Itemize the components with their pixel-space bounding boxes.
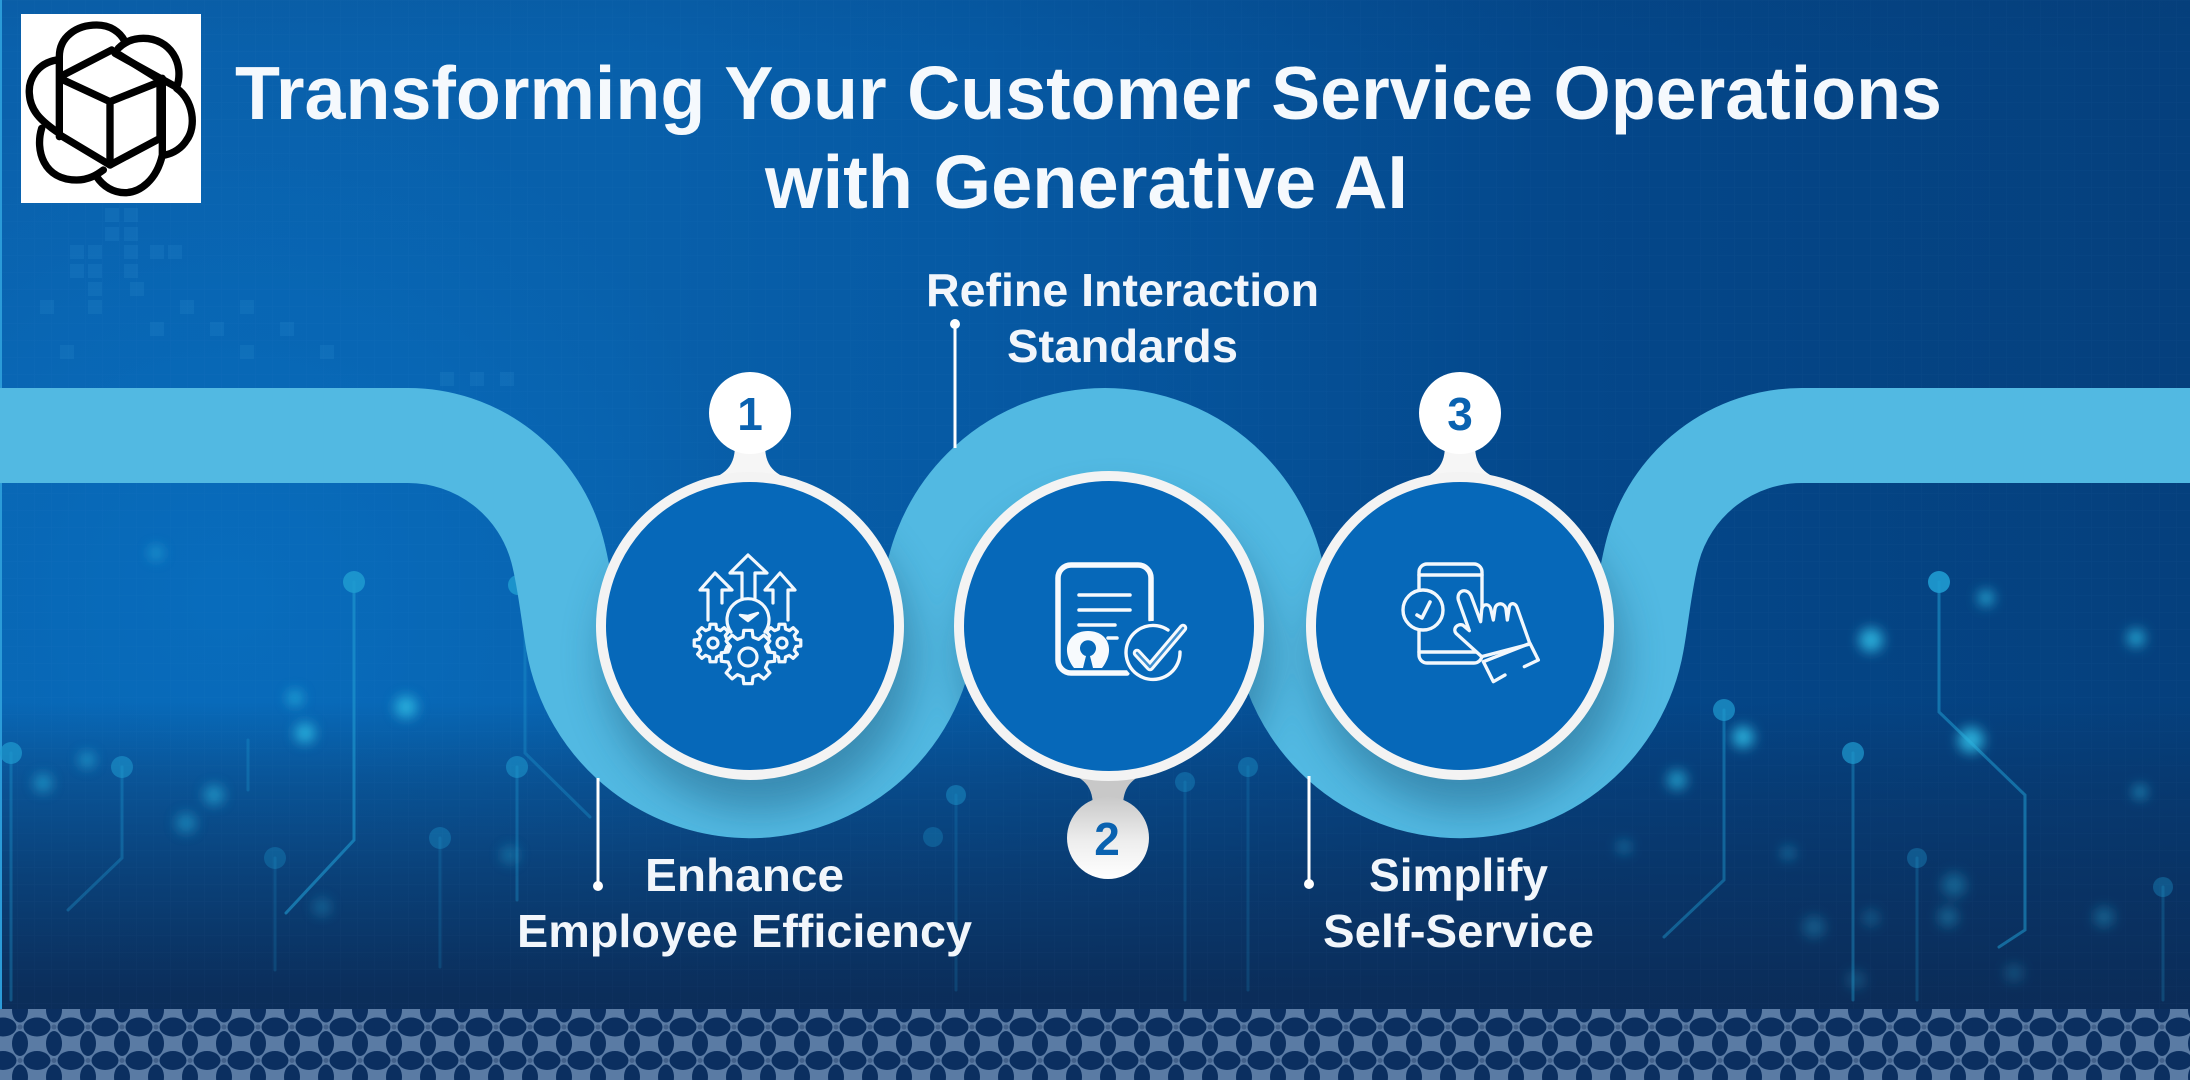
circle 1 (601, 477, 899, 775)
label: Refine Interaction Standards: Standards (1007, 320, 1238, 372)
label: Simplify Self-Service: Self-Service (1323, 905, 1594, 957)
leader line: Refine (950, 319, 960, 448)
leader line: Enhance (593, 778, 603, 891)
icon: document with seal and check (1058, 565, 1183, 683)
number bubble 2: 2 (1094, 813, 1120, 865)
bottom lattice strip (0, 1009, 2190, 1080)
label: Refine Interaction Standards (926, 264, 1319, 372)
circuit decoration: right (1617, 571, 2173, 1000)
title (235, 51, 1942, 224)
circle 3 (1311, 477, 1609, 775)
label: Enhance Employee Efficiency: Enhance (645, 849, 844, 901)
logo (21, 14, 201, 203)
number bubble 1 (698, 372, 802, 484)
icon: phone and tapping hand (1403, 564, 1538, 682)
wave band (0, 436, 2190, 791)
title: Transforming Your Customer Service Operations (235, 51, 1942, 135)
step 2 node (959, 476, 1259, 879)
label: Simplify Self-Service: Simplify (1369, 849, 1548, 901)
number bubble 3 (1408, 372, 1512, 484)
leader line: Simplify (1304, 776, 1314, 889)
step 3 node (1311, 372, 1609, 775)
circuit decoration: left (0, 546, 590, 1000)
label: Refine Interaction Standards: Refine Interaction (926, 264, 1319, 316)
circle 2 (959, 476, 1259, 776)
circuit decoration: centre (923, 757, 1258, 1000)
icon: gears and arrows (694, 555, 801, 684)
label: Simplify Self-Service (1323, 849, 1594, 957)
circle shadows on band (603, 501, 1623, 811)
number bubble 2 (1056, 768, 1160, 879)
step 1 node (601, 372, 899, 775)
number bubble 1: 1 (737, 388, 763, 440)
label: Enhance Employee Efficiency (517, 849, 972, 957)
title: with Generative AI (764, 140, 1408, 224)
label: Enhance Employee Efficiency: Employee Efficiency (517, 905, 972, 957)
number bubble 3: 3 (1447, 388, 1473, 440)
